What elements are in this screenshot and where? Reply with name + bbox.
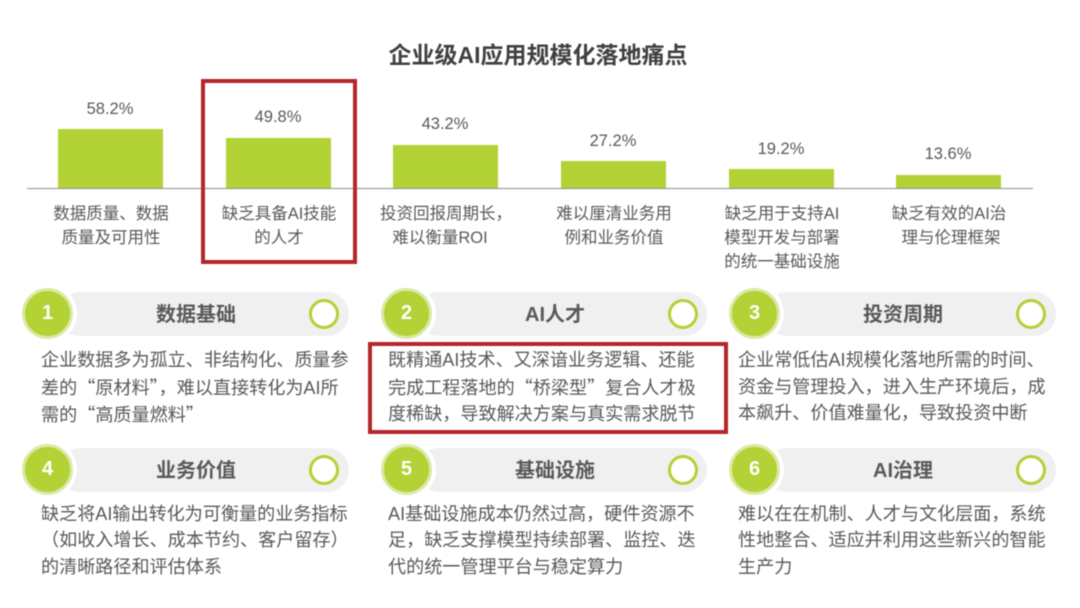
category label 2: 的人才 bbox=[254, 229, 304, 247]
bar chart bbox=[26, 100, 1034, 271]
number badge: 4 bbox=[42, 458, 53, 480]
card text 5: AI基础设施成本仍然过高，硬件资源不 bbox=[388, 504, 695, 524]
card text 2: 度稀缺，导致解决方案与真实需求脱节 bbox=[388, 404, 696, 424]
card text 2: 既精通AI技术、又深谙业务逻辑、还能 bbox=[388, 350, 695, 370]
category label 5: 的统一基础设施 bbox=[724, 253, 840, 271]
card text 1 bbox=[41, 350, 349, 427]
category label 6: 缺乏有效的AI治 bbox=[892, 205, 1006, 223]
value 4: 27.2% bbox=[590, 132, 636, 150]
category label 5: 缺乏用于支持AI bbox=[725, 205, 839, 223]
heading: 数据基础 bbox=[156, 304, 236, 326]
card text 6: 难以在在机制、人才与文化层面，系统 bbox=[738, 504, 1046, 524]
category label 3: 难以衡量ROI bbox=[392, 229, 488, 247]
card header 4 bbox=[22, 444, 349, 496]
card header 2 bbox=[380, 288, 707, 340]
category label 3 bbox=[380, 204, 512, 247]
card header 5 bbox=[380, 444, 707, 496]
category label 4 bbox=[556, 204, 672, 247]
ring icon bbox=[1016, 455, 1046, 485]
card text 5 bbox=[388, 504, 696, 576]
highlight box: talent text bbox=[368, 342, 728, 434]
card text 5: 代的统一管理平台与稳定算力 bbox=[388, 556, 623, 576]
highlight box: talent bar bbox=[201, 79, 357, 264]
category label 6 bbox=[892, 204, 1006, 247]
category label 4: 难以厘清业务用 bbox=[556, 205, 672, 223]
card text 3: 企业常低估AI规模化落地所需的时间、 bbox=[738, 350, 1045, 370]
card text 2: 完成工程落地的“桥梁型”复合人才极 bbox=[388, 374, 696, 400]
number badge bbox=[22, 444, 73, 495]
category label 1 bbox=[53, 204, 169, 247]
number badge: 1 bbox=[42, 302, 53, 324]
number badge: 6 bbox=[749, 458, 760, 480]
number badge bbox=[22, 288, 73, 339]
bar 1 bbox=[58, 129, 163, 188]
pill bbox=[58, 292, 349, 336]
card text 2 bbox=[388, 350, 696, 424]
card text 1: 企业数据多为孤立、非结构化、质量参 bbox=[41, 350, 349, 370]
category label 3: 投资回报周期长， bbox=[380, 205, 512, 223]
card header 6 bbox=[728, 444, 1056, 496]
category label 2 bbox=[222, 204, 336, 247]
card header 3 bbox=[728, 288, 1056, 340]
card text 1: 差的“原材料”，难以直接转化为AI所 bbox=[41, 374, 339, 400]
heading: 基础设施 bbox=[515, 460, 595, 482]
ring icon bbox=[309, 299, 339, 329]
axis line bbox=[27, 188, 1033, 189]
category label 2: 缺乏具备AI技能 bbox=[222, 205, 336, 223]
card text 3: 本飙升、价值难量化，导致投资中断 bbox=[738, 403, 1028, 423]
category label 1: 质量及可用性 bbox=[62, 229, 160, 247]
ring icon bbox=[668, 299, 698, 329]
category label 4: 例和业务价值 bbox=[564, 229, 664, 247]
bar 2 bbox=[226, 138, 331, 188]
card text 6: 性地整合、适应并利用这些新兴的智能 bbox=[738, 530, 1046, 550]
number badge bbox=[381, 288, 432, 339]
pill bbox=[765, 292, 1056, 336]
card text 4 bbox=[41, 504, 349, 576]
pill bbox=[765, 448, 1056, 492]
value 6: 13.6% bbox=[925, 145, 971, 163]
bar 4 bbox=[561, 161, 666, 188]
card text 4: 缺乏将AI输出转化为可衡量的业务指标 bbox=[41, 504, 348, 524]
pill bbox=[417, 448, 707, 492]
number badge bbox=[381, 444, 432, 495]
bar 5 bbox=[729, 169, 834, 188]
ring icon bbox=[309, 455, 339, 485]
value 2: 49.8% bbox=[255, 108, 301, 126]
category label 1: 数据质量、数据 bbox=[53, 205, 169, 223]
pill bbox=[58, 448, 349, 492]
number badge: 5 bbox=[401, 458, 412, 480]
card text 3 bbox=[738, 350, 1046, 423]
card text 4: （如收入增长、成本节约、客户留存） bbox=[41, 530, 349, 550]
bar 3 bbox=[393, 145, 498, 188]
ring icon bbox=[668, 455, 698, 485]
value 3: 43.2% bbox=[422, 115, 468, 133]
card text 3: 资金与管理投入，进入生产环境后，成 bbox=[738, 376, 1046, 396]
heading: AI人才 bbox=[525, 304, 585, 326]
value 1: 58.2% bbox=[87, 100, 133, 118]
ring icon bbox=[1016, 299, 1046, 329]
pill bbox=[417, 292, 707, 336]
title: 企业级AI应用规模化落地痛点 bbox=[388, 42, 688, 68]
number badge: 3 bbox=[749, 302, 760, 324]
heading: AI治理 bbox=[873, 460, 933, 482]
card text 1: 需的“高质量燃料” bbox=[41, 401, 204, 427]
card text 4: 的清晰路径和评估体系 bbox=[41, 556, 222, 576]
heading: 投资周期 bbox=[863, 304, 943, 326]
card text 6 bbox=[738, 504, 1046, 576]
number badge: 2 bbox=[401, 302, 412, 324]
number badge bbox=[729, 444, 780, 495]
value 5: 19.2% bbox=[758, 140, 804, 158]
category label 5: 模型开发与部署 bbox=[724, 229, 840, 247]
category label 6: 理与伦理框架 bbox=[902, 229, 1000, 247]
card text 6: 生产力 bbox=[738, 556, 792, 576]
card text 5: 足，缺乏支撑模型持续部署、监控、迭 bbox=[388, 530, 696, 550]
card header 1 bbox=[22, 288, 349, 340]
category label 5 bbox=[724, 204, 840, 271]
heading: 业务价值 bbox=[156, 460, 236, 482]
number badge bbox=[729, 288, 780, 339]
bar 6 bbox=[896, 175, 1001, 188]
